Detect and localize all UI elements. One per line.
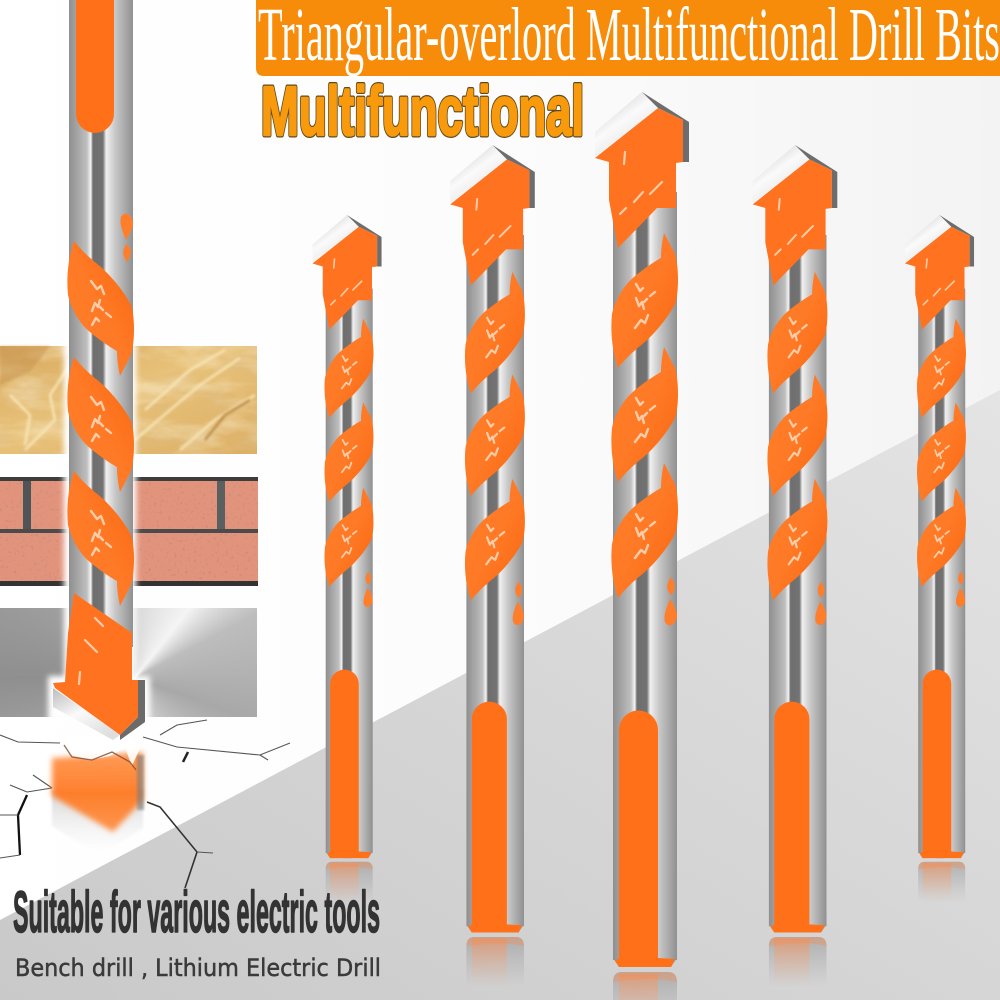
reflections under drill bits bbox=[326, 862, 965, 1000]
head of main bit bbox=[53, 593, 145, 740]
panel: steel sample bbox=[0, 608, 257, 717]
white glow around main bit bbox=[48, 340, 150, 722]
main bit driving downward through materials bbox=[53, 0, 145, 740]
drill bit 3 bbox=[595, 92, 689, 967]
icon: bit head emerging through wall bbox=[52, 733, 144, 856]
drill bit 5 bbox=[905, 215, 974, 858]
subheading: Multifunctional bbox=[261, 72, 584, 150]
slot at top of main bit bbox=[76, 0, 114, 133]
drill bit 1 bbox=[312, 215, 382, 858]
cracked wall fractures bbox=[0, 720, 290, 888]
drill bit 2 bbox=[450, 145, 535, 933]
subheading: Multifunctional: Multifunctional bbox=[261, 72, 584, 150]
text: Suitable for various electric tools bbox=[13, 880, 380, 945]
subheading: Multifunctional: Multifunctional bbox=[261, 72, 584, 150]
panel: marble sample bbox=[0, 346, 257, 454]
drill bit 4 bbox=[753, 145, 837, 933]
panel: brick sample bbox=[0, 477, 258, 586]
caption subtext: Bench drill , Lithium Electric Drill bbox=[15, 954, 381, 982]
